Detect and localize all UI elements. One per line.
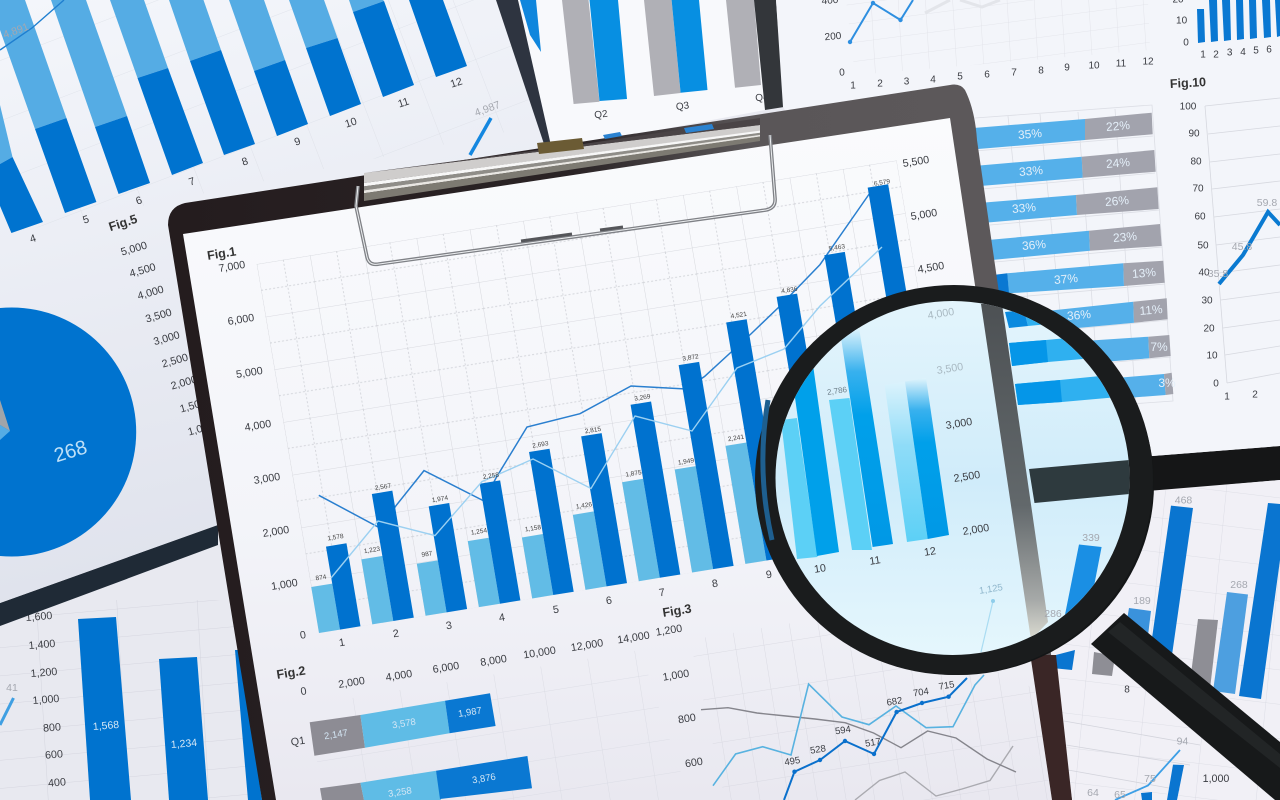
Fig.3 line chart: 704	[912, 686, 930, 699]
axis labels: 41	[6, 682, 18, 694]
x axis labels: 11	[396, 96, 411, 110]
Fig.1 x axis labels: 1	[338, 637, 346, 649]
Fig.1 y axis labels: 4,000	[244, 418, 272, 434]
x axis labels: 12	[449, 75, 464, 91]
x axis labels	[28, 75, 464, 246]
line chart fragment: 3	[904, 76, 910, 88]
Fig.2 stacked bar chart: 3,578	[391, 717, 417, 731]
Fig.1 value labels: 5,463	[828, 243, 846, 253]
Fig.1 value labels: 2,693	[532, 440, 549, 450]
magnified labels: 11	[869, 554, 881, 568]
Fig.5 axis labels: 2,500	[160, 352, 190, 370]
stacked horizontal percentage bars: 26%	[1104, 193, 1130, 209]
light series bars	[299, 443, 766, 633]
axis labels	[6, 610, 198, 790]
Fig.1 y axis labels: 5,000	[910, 207, 938, 223]
value stub 4,987: 4,987	[473, 99, 502, 119]
Fig.2 stacked bar chart: Fig.2	[275, 663, 307, 682]
lower chart fragment: 1,000	[1203, 773, 1229, 785]
Fig.3 line chart: 600	[684, 756, 704, 770]
Fig.1 value labels: 3,269	[634, 393, 651, 403]
magnified board band	[1029, 460, 1130, 503]
stacked horizontal percentage bars: 36%	[1021, 237, 1047, 253]
Fig.2 stacked bar chart: 2,147	[323, 728, 349, 742]
magnified labels: 10	[813, 562, 827, 576]
sheet: bottom-left bar chart	[0, 600, 270, 800]
Fig.10 line chart: 80	[1190, 156, 1202, 168]
Fig.3 line chart	[655, 600, 1050, 800]
Fig.1 value labels: 6,579	[873, 178, 891, 188]
stacked horizontal percentage bars: 37%	[1053, 271, 1079, 287]
Fig.1 value labels: 987	[421, 550, 433, 559]
clipboard board	[168, 85, 1072, 800]
magnified bar 339: 286	[1044, 608, 1062, 620]
line stub	[0, 698, 14, 725]
Fig.1 y axis labels: 2,000	[262, 524, 290, 540]
mini bar chart: 10	[1176, 16, 1188, 26]
bar: 468	[1150, 506, 1193, 655]
mini bar chart: 5	[1253, 46, 1259, 56]
Fig.1 value labels: 1,223	[363, 546, 381, 555]
stacked horizontal percentage bars: 13%	[1131, 265, 1157, 281]
Fig.5 axis labels: 2,000	[169, 374, 199, 392]
Fig.1 x axis labels: 2	[392, 628, 400, 640]
line chart fragment: 10	[1088, 60, 1100, 72]
Fig.1 y axis labels: 5,500	[902, 154, 930, 170]
magnified labels: 12	[923, 545, 937, 559]
Fig.2 stacked bar chart: 8,000	[479, 653, 508, 669]
Fig.1 y axis labels: 1,000	[270, 577, 299, 593]
Fig.1 value labels: 1,974	[431, 495, 449, 504]
Fig.3 line chart: 682	[886, 695, 903, 709]
Fig.1 value labels: 2,258	[482, 472, 500, 481]
Fig.1 y axis labels: 0	[299, 629, 307, 642]
Fig.3 line chart: 594	[834, 724, 852, 737]
dark series bars	[326, 184, 906, 630]
Fig.1 x axis labels: 8	[711, 578, 719, 590]
mini bar chart: 3	[1227, 48, 1233, 58]
sheet: Q2 Q3 grouped bars	[496, 0, 784, 150]
Fig.1 y axis labels: 6,000	[227, 312, 255, 328]
axis labels: 1,568	[92, 719, 120, 733]
Fig.10 line chart: 10	[1206, 350, 1218, 362]
x axis labels: 4	[28, 232, 38, 246]
Fig.2 stacked bar chart: 3,876	[471, 772, 497, 786]
Fig.1 y axis labels: 5,000	[235, 365, 264, 381]
Fig.1 value labels: 1,158	[524, 524, 542, 534]
magnified labels: 2,000	[962, 522, 990, 538]
stacked horizontal percentage bars: 24%	[1105, 155, 1131, 171]
clipboard right lower edge	[1030, 655, 1072, 800]
lens view	[776, 301, 1130, 655]
sheet: top-left stacked bars and pie: 4,891	[2, 21, 31, 41]
Fig.2 stacked bar chart: 6,000	[432, 660, 460, 676]
sheet: Q2 Q3 grouped bars: Q4	[755, 92, 770, 104]
magnifying glass	[755, 285, 1280, 800]
Fig.2 stacked bar chart: 1,987	[457, 705, 483, 720]
Fig.3 line chart: 1,000	[662, 668, 690, 684]
pie chart: 268	[52, 436, 90, 467]
line chart fragment: 1	[850, 80, 856, 92]
Fig.10 line chart: 59.8	[1257, 197, 1277, 209]
Fig.1 x axis labels: 6	[605, 595, 613, 607]
stacked horizontal percentage bars: 22%	[1105, 118, 1131, 134]
Fig.10 line chart: 90	[1188, 128, 1200, 140]
bar: 1,234	[159, 657, 208, 800]
Fig.1 value labels: 2,815	[584, 426, 602, 435]
rim	[762, 293, 1154, 675]
Fig.10 line chart: 50	[1197, 240, 1209, 252]
light upper segments	[0, 0, 384, 164]
x axis labels: 5	[81, 213, 91, 227]
light trend line	[331, 247, 882, 578]
mini bar chart: 6	[1266, 44, 1272, 56]
stacked horizontal percentage bars: 7%	[1150, 340, 1168, 354]
Fig.2 stacked bar chart: 2,000	[337, 675, 366, 691]
Fig.2 stacked bar chart: 4,000	[385, 668, 413, 684]
Fig.1 value labels: 1,254	[470, 527, 488, 537]
line chart fragment: 2	[877, 78, 883, 90]
Fig.2 stacked bar chart: 0	[300, 685, 308, 698]
Fig.10 line chart	[1180, 98, 1280, 402]
Fig.1 value labels: 2,567	[374, 483, 392, 492]
axis labels: 1,200	[30, 666, 58, 680]
axis labels: 1,000	[32, 693, 60, 707]
magnified labels: 1,125	[978, 582, 1004, 597]
Fig.1 y axis labels: 3,000	[253, 471, 281, 487]
Fig.2 stacked bar chart	[275, 630, 690, 800]
Fig.10 line chart: 30	[1201, 296, 1213, 306]
Fig.1 value labels: 2,241	[727, 434, 745, 443]
x axis labels: 10	[343, 115, 359, 131]
Fig.3 line chart: 715	[938, 679, 955, 693]
Fig.10 line chart: 40	[1198, 268, 1210, 278]
line chart fragment: 5	[957, 72, 963, 82]
Fig.1 value labels: 1,875	[625, 469, 642, 479]
Fig.3 line chart: 495	[784, 755, 801, 768]
Fig.5 axis labels: 4,500	[128, 261, 157, 280]
Fig.5 axis labels: 4,000	[136, 284, 165, 302]
magnified labels	[813, 306, 1004, 652]
Fig.1 value labels: 1,426	[575, 501, 593, 511]
lower chart fragment	[1064, 721, 1229, 800]
magnified labels: 4,000	[927, 306, 955, 322]
magnified labels: 2,786	[826, 385, 848, 397]
Fig.10 line chart: 20	[1203, 324, 1215, 334]
panel: paper charts	[206, 154, 1050, 800]
Fig.3 line chart: 1,200	[655, 623, 683, 639]
lower chart fragment: 94	[1177, 736, 1188, 748]
Fig.1 value labels: 874	[315, 574, 327, 582]
Fig.5 axis labels: 1,500	[178, 397, 208, 415]
Fig.2 stacked bar chart: 14,000	[616, 630, 651, 646]
axis labels: 1,600	[25, 610, 53, 624]
magnified column bars	[782, 328, 949, 559]
Fig.5 axis labels: 5,000	[119, 240, 149, 258]
sheet: Q2 Q3 grouped bars: Q3	[675, 100, 690, 113]
magnified bar 339	[1044, 534, 1102, 617]
sheet: bottom-right bar chart	[1040, 480, 1280, 800]
magnified horizontal bars	[1005, 311, 1110, 405]
axis labels: 1,234	[170, 737, 198, 751]
x axis labels: 6	[134, 194, 144, 208]
line chart fragment: 0	[839, 67, 846, 79]
mini bar chart: 0	[1183, 38, 1189, 48]
Fig.5 axis labels: 3,000	[152, 329, 181, 348]
line chart fragment: 6	[984, 70, 990, 80]
sheet: top-left stacked bars and pie	[0, 0, 550, 626]
Fig.1 x axis labels: 7	[658, 587, 666, 599]
clipboard metal clip	[356, 118, 775, 264]
trend line fragment	[0, 0, 64, 50]
Fig.1 value labels	[315, 178, 891, 582]
mini bar chart	[1172, 0, 1280, 60]
stacked horizontal percentage bars: 33%	[1011, 200, 1037, 216]
Fig.1 y axis labels: 7,000	[218, 259, 246, 275]
line chart fragment: 8	[1038, 66, 1044, 76]
sheet: bottom-right bar chart: 189	[1133, 595, 1151, 607]
Fig.10 line chart: 35.8	[1208, 268, 1228, 280]
stacked horizontal percentage bars: 11%	[1139, 302, 1163, 318]
Fig.1 grid	[256, 160, 918, 600]
dark lower segments	[0, 0, 467, 233]
stacked horizontal percentage bars: 3%	[1158, 376, 1176, 390]
Fig.2 stacked bar chart: 10,000	[523, 645, 557, 661]
line chart fragment: 200	[824, 31, 842, 43]
Fig.10 line chart: 1	[1224, 392, 1230, 402]
stacked horizontal percentage bars: 23%	[1112, 229, 1138, 245]
Fig.10 line chart: 70	[1192, 184, 1204, 194]
bar: partial	[235, 650, 262, 800]
Fig.5 axis labels: 1,000	[186, 420, 216, 438]
Fig.1 value labels: 1,578	[327, 533, 344, 542]
pie chart	[0, 308, 136, 556]
x axis labels: 8	[240, 155, 250, 169]
Fig.10 line chart: 45.8	[1232, 241, 1252, 253]
Fig.2 stacked bar chart: 3,258	[387, 785, 413, 800]
Fig.2 stacked bar chart: 12,000	[570, 637, 604, 654]
axis labels: 800	[43, 721, 61, 735]
x axis labels: 9	[293, 135, 302, 149]
Fig.5 axis labels	[119, 240, 216, 438]
Fig.10 line chart: 60	[1194, 212, 1206, 222]
Fig.3 line chart: 528	[809, 743, 827, 757]
Fig.10 line chart: 2	[1252, 390, 1258, 400]
paper sheet	[183, 118, 1052, 800]
line chart fragment: 11	[1116, 58, 1127, 70]
heading: Fig.10: Fig.10	[1170, 75, 1206, 91]
mini bar chart: 1	[1200, 50, 1206, 60]
Fig.10 line chart: 0	[1213, 378, 1219, 390]
magnified labels: 3,500	[936, 361, 964, 377]
sheet: bottom-right bar chart: 268	[1230, 579, 1248, 591]
Fig.1 x axis labels: 4	[498, 612, 506, 624]
Fig.1 bar chart	[311, 184, 906, 633]
bar: tall right	[1239, 503, 1280, 699]
mini bar chart: 4	[1240, 47, 1246, 58]
stacked horizontal percentage bars: 33%	[1018, 163, 1044, 179]
Fig.1 x axis labels: 5	[552, 604, 560, 616]
line chart fragment: 9	[1064, 62, 1070, 74]
magnified labels: 3,000	[945, 416, 973, 432]
lower chart fragment: 64	[1087, 787, 1099, 799]
handle	[1091, 613, 1280, 800]
Fig.1 value labels: 3,872	[682, 353, 700, 363]
axis labels: 600	[45, 748, 63, 762]
bar: 1,568	[78, 617, 131, 800]
axis labels: 1,400	[28, 638, 56, 652]
line chart fragment: 7	[1011, 68, 1017, 78]
Fig.1 y axis labels	[218, 154, 945, 642]
sheet: bottom-right bar chart: 468	[1175, 494, 1192, 506]
magnified bar 339: 339	[1082, 532, 1100, 544]
stacked horizontal percentage bars	[970, 105, 1176, 412]
Fig.5 axis labels: 3,500	[144, 307, 173, 325]
stacked horizontal percentage bars: 35%	[1017, 126, 1043, 142]
Fig.3 line chart: 517	[864, 736, 882, 750]
sheet: bottom-right bar chart: 8	[1124, 684, 1130, 696]
line chart fragment: 12	[1142, 56, 1154, 68]
Fig.1 x axis labels: 3	[445, 620, 453, 632]
stacked column bars	[0, 0, 467, 233]
Fig.1 x axis labels: 9	[765, 569, 773, 581]
line chart fragment: 4	[930, 74, 936, 86]
magnified labels: 2,500	[953, 469, 981, 485]
Fig.1 y axis labels: 4,500	[917, 260, 945, 276]
axis labels: 400	[48, 776, 66, 790]
bar: 189	[1122, 608, 1151, 652]
sheet: top-right charts	[776, 0, 1280, 505]
Fig.3 line chart: Fig.3	[661, 601, 693, 620]
Fig.1 value labels: 4,836	[781, 286, 798, 295]
Fig.10 line chart: 100	[1180, 102, 1197, 112]
lower chart fragment: 75	[1144, 773, 1156, 785]
Fig.2 stacked bar chart: Q1	[290, 735, 306, 749]
heading: Fig.1: Fig.1	[206, 244, 237, 263]
Fig.3 line chart: 800	[677, 712, 697, 726]
dark trend line	[319, 190, 872, 528]
mini bar chart: 2	[1213, 50, 1219, 60]
Fig.1 value labels: 4,521	[730, 311, 748, 320]
Fig.1 x axis labels	[338, 569, 773, 649]
Fig.1 value labels: 1,949	[677, 457, 695, 467]
heading: Fig.5: Fig.5	[107, 212, 139, 234]
stacked horizontal percentage bars: 36%	[1066, 307, 1092, 323]
bar: 268	[1213, 592, 1248, 694]
x axis labels: 7	[187, 175, 197, 189]
value stub 4,987	[470, 99, 502, 155]
line chart fragment	[821, 0, 1154, 92]
sheet: Q2 Q3 grouped bars: Q2	[594, 109, 609, 121]
bar: grey	[1190, 619, 1218, 689]
magnified board edge	[981, 304, 1048, 640]
